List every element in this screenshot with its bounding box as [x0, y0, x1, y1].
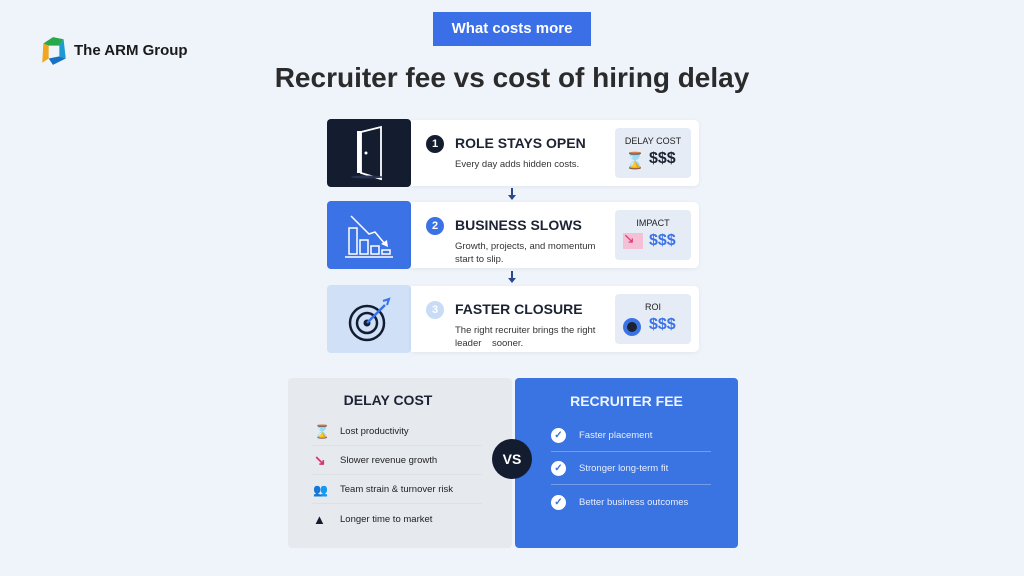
impact mini: ↘	[623, 230, 635, 246]
panel: recruiter fee: ✓	[554, 463, 563, 474]
row 3: The right recruiter brings the right leader sooner.	[455, 325, 595, 349]
panel: delay cost: Lost productivity	[340, 426, 409, 437]
row 2: 2	[432, 220, 438, 232]
icon: door	[327, 119, 411, 187]
row 3	[327, 285, 699, 353]
panel: delay cost: 👥	[313, 482, 328, 496]
panel: delay cost: Longer time to market	[340, 514, 432, 524]
roi mini: ROI	[645, 302, 661, 312]
roi mini	[615, 294, 691, 344]
panel: recruiter fee: Stronger long-term fit	[579, 463, 668, 474]
panel: delay cost: Team strain & turnover risk	[340, 484, 453, 495]
vs badge	[492, 439, 532, 479]
row 1	[327, 119, 699, 187]
row 1: 1	[432, 138, 438, 150]
row 2: Growth, projects, and momentum start to slip.	[455, 241, 595, 265]
row 3: 3	[432, 304, 438, 316]
delay cost mini: DELAY COST	[625, 136, 681, 146]
panel: recruiter fee: Faster placement	[579, 430, 652, 441]
row 2: BUSINESS SLOWS	[455, 217, 582, 233]
arrow	[511, 271, 513, 279]
impact mini: $$$	[649, 232, 676, 249]
badge	[433, 12, 591, 46]
icon: target	[327, 285, 411, 353]
panel: delay cost: Slower revenue growth	[340, 455, 437, 466]
panel: recruiter fee: ✓	[554, 430, 563, 441]
logo: The ARM Group	[74, 42, 188, 59]
panel: delay cost: ▲	[313, 512, 326, 526]
row 1: Every day adds hidden costs.	[455, 159, 579, 170]
row 2	[327, 201, 699, 269]
row 3: FASTER CLOSURE	[455, 301, 583, 317]
impact mini	[615, 210, 691, 260]
delay cost mini	[615, 128, 691, 178]
delay cost mini: $$$	[649, 150, 676, 167]
panel: delay cost: ⌛	[314, 424, 330, 438]
vs badge: VS	[503, 451, 521, 467]
roi mini: $$$	[649, 316, 676, 333]
panel: recruiter fee	[515, 378, 738, 548]
arrow	[511, 188, 513, 196]
impact mini: IMPACT	[636, 218, 670, 228]
badge: What costs more	[452, 20, 572, 37]
panel: delay cost	[288, 378, 512, 548]
icon: declining chart	[327, 201, 411, 269]
panel: recruiter fee: ✓	[554, 496, 563, 508]
delay cost mini: ⌛	[625, 153, 645, 170]
panel: recruiter fee: Better business outcomes	[579, 496, 688, 508]
row 1: ROLE STAYS OPEN	[455, 135, 586, 151]
logo	[42, 37, 188, 65]
title: Recruiter fee vs cost of hiring delay	[275, 62, 749, 93]
panel: recruiter fee: RECRUITER FEE	[570, 393, 683, 409]
panel: delay cost: ↘	[314, 452, 326, 468]
panel: delay cost: DELAY COST	[344, 392, 432, 408]
